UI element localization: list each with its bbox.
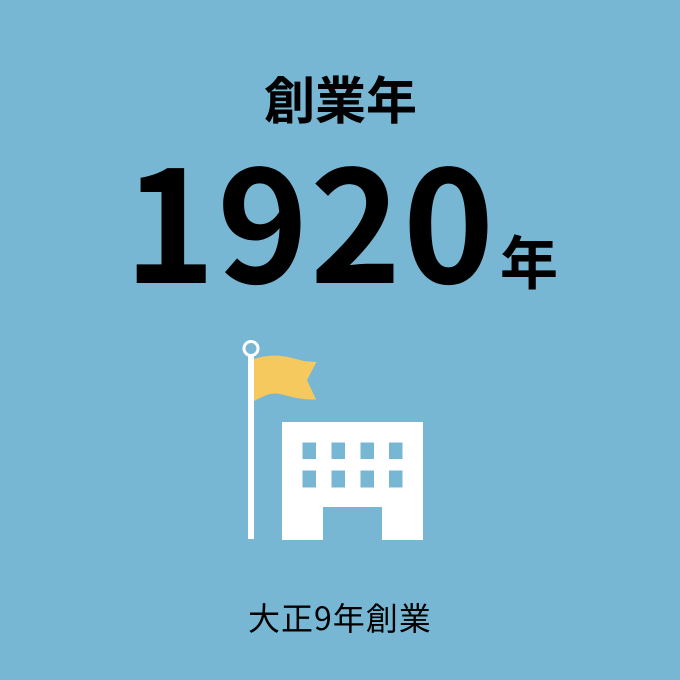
icon: flag and building bbox=[242, 340, 423, 540]
flag pole bbox=[244, 342, 258, 539]
caption: 大正9年創業 bbox=[248, 594, 432, 640]
year unit: 年 bbox=[500, 217, 558, 301]
building bbox=[282, 422, 423, 540]
flag bbox=[254, 356, 316, 401]
big year number: 1920 bbox=[124, 103, 496, 328]
heading: 創業年 bbox=[264, 60, 417, 134]
